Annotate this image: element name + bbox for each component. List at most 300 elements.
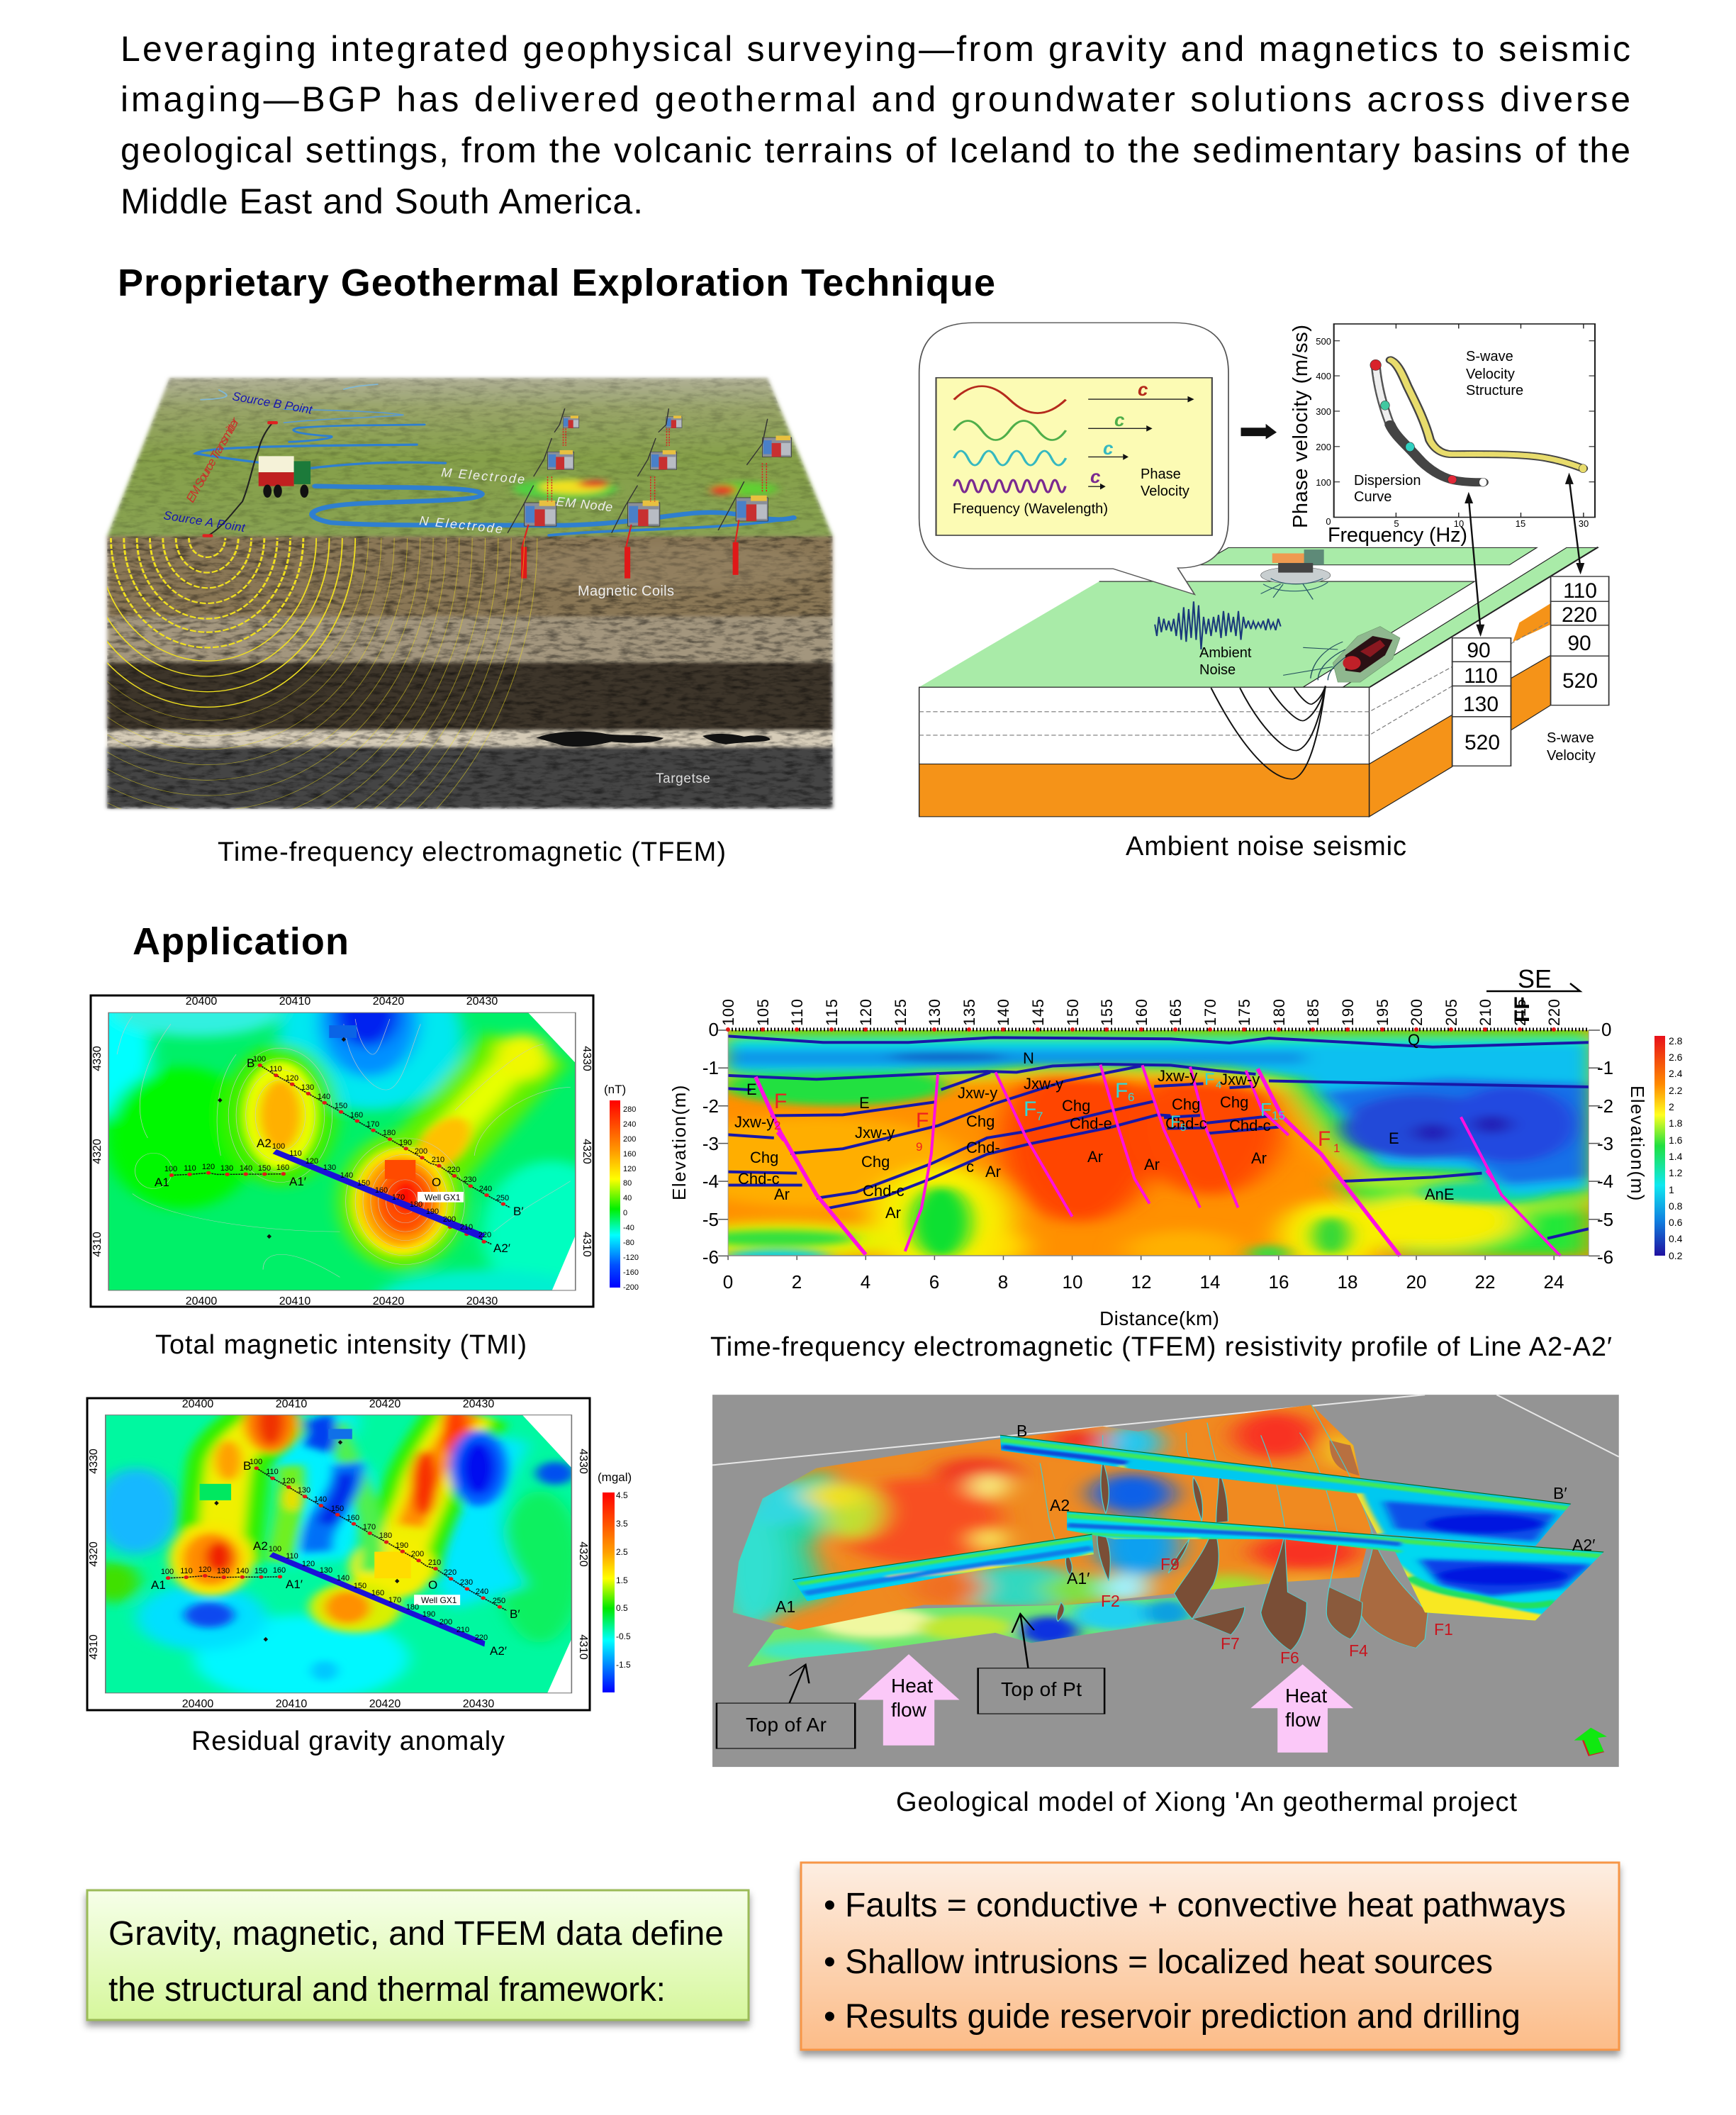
line A2 highlight [273,1149,485,1240]
panel: residual gravity map: 120 [282,1477,295,1485]
panel: TFEM resistivity profile: 18 [1338,1271,1357,1293]
panel: total magnetic intensity map: 20430 [466,1295,498,1307]
panel: TFEM resistivity profile: 8 [998,1271,1008,1293]
panel: TFEM resistivity profile: FF [1511,996,1534,1022]
panel: residual gravity map: 160 [371,1589,384,1597]
panel: TFEM resistivity profile: 0 [723,1271,733,1293]
panel: TFEM block diagram: Targetse [656,771,710,786]
fault labels: 15 [1272,1109,1285,1122]
panel: total magnetic intensity map: 4310 [581,1232,593,1257]
panel: TFEM resistivity profile: 1.6 [1669,1134,1683,1146]
panel: ambient noise seismic diagram: Structure [1466,383,1523,398]
fault labels: F [774,1090,787,1113]
panel: TFEM resistivity profile: 185 [1304,999,1322,1026]
panel: TFEM resistivity profile: -1 [1597,1057,1613,1078]
geologic labels: E [1389,1129,1399,1147]
geologic labels: Chd-c [738,1170,780,1188]
panel: TFEM resistivity profile: 1 [1669,1184,1674,1195]
panel: TFEM block diagram: M Electrode [441,465,525,486]
Top of Pt surface [747,1597,1192,1667]
panel: residual gravity map: 240 [476,1587,488,1596]
panel: ambient noise seismic diagram: c [1114,409,1125,430]
panel: residual gravity map: 170 [388,1596,401,1605]
panel: ambient noise seismic diagram: Phase [1141,467,1181,482]
panel: residual gravity map: 140 [337,1574,349,1583]
panel: residual gravity map: 180 [406,1603,419,1612]
panel: total magnetic intensity map: 20400 [186,995,217,1008]
panel: TFEM resistivity profile: 205 [1443,999,1460,1026]
panel: residual gravity map: 20400 [182,1698,213,1710]
panel: ambient noise seismic diagram: Noise [1199,662,1236,678]
geologic labels: Ar [985,1163,1001,1181]
panel: ambient noise seismic diagram: 5 [1394,518,1399,529]
panel: ambient noise seismic diagram: 30 [1579,518,1589,529]
panel: residual gravity map: 2.5 [616,1547,628,1557]
geologic labels: Chd-e [1070,1115,1112,1132]
geologic labels: E [746,1081,757,1098]
panel: total magnetic intensity map: 200 [443,1215,456,1224]
panel: TFEM resistivity profile: 2.4 [1669,1068,1683,1079]
panel: residual gravity map: 160 [273,1566,286,1575]
callout: green summary box [87,1890,749,2020]
curves [1376,360,1583,482]
panel: residual gravity map: 200 [411,1550,424,1558]
geologic labels: c [966,1158,974,1176]
panel: TFEM resistivity profile: 145 [1029,999,1047,1026]
source wire [207,423,273,536]
panel: 3D geological model: flow [1285,1709,1321,1731]
truck [259,456,294,472]
top of Ar / Pt boxes [717,1703,855,1748]
panel: total magnetic intensity map: 100 [164,1165,177,1173]
fault labels: 5 [1180,1122,1186,1134]
panel: TFEM resistivity profile: SE [1518,964,1552,993]
ambient noise waveform [1155,601,1281,649]
fault labels: F [1024,1098,1036,1121]
panel: ambient noise seismic diagram: Frequency (Hz) [1328,524,1467,547]
panel: residual gravity map: 140 [314,1495,327,1504]
fault labels: 4 [1216,1079,1221,1091]
panel: total magnetic intensity map: 280 [623,1105,636,1114]
panel: 3D geological model: Top of Pt [1001,1678,1082,1700]
panel: TFEM resistivity profile: 2.6 [1669,1051,1683,1063]
panel: ambient noise seismic diagram: Dispersion [1354,473,1421,489]
contours [117,1017,571,1277]
geologic labels: Chg [861,1153,890,1171]
panel: ambient noise seismic diagram: Phase velocity (m/ss) [1289,325,1312,528]
geologic labels [734,1031,1455,1222]
fault labels: F [1204,1070,1215,1089]
panel: total magnetic intensity map: 190 [399,1139,412,1147]
panel: ambient noise seismic diagram: 90 [1467,639,1491,662]
geologic labels: Ar [1087,1148,1103,1166]
panel: TFEM resistivity profile [666,964,1683,1329]
fault lines [756,1065,1560,1256]
panel: residual gravity map [86,1393,632,1710]
panel: residual gravity map: 220 [475,1634,488,1642]
panel: total magnetic intensity map: 130 [301,1083,314,1092]
patches [329,1025,357,1038]
panel: total magnetic intensity map: 180 [410,1200,422,1209]
panel: residual gravity map: 4320 [88,1541,100,1567]
panel: residual gravity map: 190 [396,1541,408,1550]
panel: TFEM resistivity profile: 0 [709,1019,719,1040]
panel: ambient noise seismic diagram: Velocity [1141,484,1189,499]
panel: total magnetic intensity map: A1 [155,1176,169,1189]
panel: TFEM resistivity profile: 2.8 [1669,1035,1683,1047]
geologic labels: Chg [1172,1095,1200,1113]
panel: total magnetic intensity map: Well GX1 [425,1193,461,1202]
panel: total magnetic intensity map: 20410 [279,995,310,1008]
geologic labels: Chd-c [863,1182,905,1200]
panel: total magnetic intensity map: 160 [276,1163,289,1172]
callout: orange bullet box: • Shallow intrusions = localized heat sources [824,1943,1493,1981]
panel: total magnetic intensity map: 170 [392,1193,405,1202]
frequency waves [954,386,1066,492]
panel: TFEM resistivity profile: 22 [1475,1271,1495,1293]
panel: total magnetic intensity map: 4320 [91,1139,103,1164]
panel: TFEM block diagram: N Electrode [419,513,503,536]
heading: application: Application [133,920,349,963]
panel: residual gravity map: A1′ [286,1578,303,1591]
panel: TFEM resistivity profile: 0.8 [1669,1200,1683,1212]
panel: TFEM resistivity profile: 170 [1202,999,1219,1026]
geologic labels: Jxw-y [855,1124,895,1142]
panel: total magnetic intensity map: 130 [323,1163,336,1172]
panel: total magnetic intensity map: 20400 [186,1295,217,1307]
geologic labels: Q [1408,1031,1420,1049]
survey truck [1261,567,1331,584]
caption: TMI: Total magnetic intensity (TMI) [155,1330,527,1360]
heat anomalies [513,479,778,499]
geologic labels: Jxw-y [734,1113,774,1131]
panel: total magnetic intensity map: 20420 [373,995,404,1008]
panel: total magnetic intensity map: -80 [623,1239,634,1247]
panel: total magnetic intensity map: 240 [623,1120,636,1129]
panel: residual gravity map: 160 [347,1514,359,1522]
panel: TFEM resistivity profile: 210 [1477,999,1494,1026]
panel: total magnetic intensity map: 160 [350,1111,363,1120]
panel: TFEM resistivity profile: 100 [719,999,737,1026]
panel: residual gravity map: -1.5 [616,1660,631,1670]
panel: TFEM resistivity profile: 190 [1339,999,1357,1026]
panel: TFEM resistivity profile: 6 [929,1271,939,1293]
panel: residual gravity map: (mgal) [598,1471,632,1484]
fault labels: 6 [1128,1090,1134,1104]
panel: total magnetic intensity map: 140 [240,1164,252,1173]
ray paths [1211,686,1326,779]
panel: residual gravity map: 100 [269,1545,281,1553]
panel: residual gravity map: 180 [379,1531,392,1540]
flow arrow [1241,424,1277,439]
panel: total magnetic intensity map: -160 [623,1268,639,1277]
panel: residual gravity map: 250 [493,1597,505,1605]
panel: 3D geological model: B′ [1553,1484,1567,1502]
panel: 3D geological model: B [1017,1422,1027,1440]
panel: residual gravity map: 100 [250,1458,262,1466]
intro paragraph [121,29,1630,221]
panel: ambient noise seismic diagram: 200 [1316,442,1331,452]
heat flow arrows [858,1654,960,1746]
panel: total magnetic intensity map: 100 [253,1055,266,1064]
horizon lines [728,1036,1589,1239]
panel: total magnetic intensity map: 120 [286,1074,298,1083]
geologic labels: Chg [1220,1093,1248,1111]
callout: green summary box: the structural and thermal framework: [108,1971,666,2009]
panel: TFEM resistivity profile: 0.4 [1669,1233,1683,1244]
fault labels: 7 [1036,1110,1043,1123]
panel: TFEM resistivity profile: 165 [1167,999,1185,1026]
panel: residual gravity map: 3.5 [616,1519,628,1529]
panel: TFEM resistivity profile: 155 [1098,999,1116,1026]
panel: total magnetic intensity map: -200 [623,1283,639,1292]
geologic labels: E [859,1094,870,1112]
panel: total magnetic intensity map: 150 [335,1102,347,1110]
panel: TFEM resistivity profile: -3 [702,1133,719,1154]
panel: 3D geological model: F9 [1160,1555,1180,1573]
panel: residual gravity map: 130 [320,1566,332,1575]
resistivity colorbar [1654,1036,1665,1256]
panel: residual gravity map: -0.5 [616,1631,631,1641]
panel: residual gravity map: 120 [198,1566,211,1574]
panel: total magnetic intensity map: 120 [623,1165,636,1173]
panel: total magnetic intensity map: 200 [415,1147,427,1156]
panel: ambient noise seismic diagram: 10 [1454,518,1464,529]
fault labels [774,1070,1340,1155]
panel: TFEM block diagram: EM Node [556,494,613,514]
geologic labels: Jxw-y [1158,1067,1197,1085]
geologic labels: Chd- [966,1139,1000,1156]
panel: TFEM resistivity profile: 105 [754,999,772,1026]
panel: TFEM resistivity profile: 20 [1406,1271,1426,1293]
panel: TFEM resistivity profile: -3 [1597,1133,1613,1154]
panel: TFEM block diagram: Magnetic Coils [578,584,674,599]
panel: TFEM resistivity profile: 120 [857,999,875,1026]
geologic labels: Chd-c [1165,1115,1207,1132]
panel: ambient noise seismic diagram: S-wave [1466,349,1513,364]
panel: TFEM resistivity profile: 195 [1374,999,1391,1026]
panel: total magnetic intensity map: 110 [289,1149,302,1158]
fault labels: F [1115,1079,1128,1103]
caption: gravity: Residual gravity anomaly [191,1726,505,1756]
panel: TFEM resistivity profile: 110 [788,999,806,1026]
survey line B [260,1065,510,1207]
panel: ambient noise seismic diagram: Velocity [1547,748,1596,764]
panel: total magnetic intensity map: 0 [623,1209,627,1217]
geologic labels: Chg [1062,1097,1090,1115]
panel: ambient noise seismic diagram: 300 [1316,406,1331,417]
callout bubble [919,323,1228,595]
panel: residual gravity map: A1 [151,1578,166,1592]
panel: ambient noise seismic diagram [919,323,1609,817]
panel: 3D geological model: F7 [1221,1634,1240,1653]
panel: total magnetic intensity map: 130 [220,1164,233,1173]
panel: 3D geological model: F1 [1434,1620,1453,1639]
panel: total magnetic intensity map: 220 [447,1166,460,1174]
panel: 3D geological model: F2 [1101,1592,1120,1610]
panel: TFEM resistivity profile: 12 [1131,1271,1151,1293]
panel: total magnetic intensity map: 4310 [91,1232,103,1257]
panel: total magnetic intensity map: 160 [623,1150,636,1159]
geologic labels: Chd-c [1229,1117,1271,1134]
panel: TFEM resistivity profile: 24 [1544,1271,1564,1293]
panel: TFEM resistivity profile: -4 [1597,1171,1613,1192]
axis ticks [718,1030,1600,1260]
panel: TFEM resistivity profile: -5 [1597,1209,1613,1230]
panel: residual gravity map: O [428,1578,437,1592]
train [1333,626,1400,682]
panel: total magnetic intensity map: 100 [272,1142,285,1151]
velocity tables [1452,576,1609,766]
panel: residual gravity map: 0.5 [616,1603,628,1613]
panel: TFEM resistivity profile: 140 [995,999,1012,1026]
panel: residual gravity map: 220 [444,1568,457,1577]
panel: TFEM resistivity profile: 150 [1064,999,1082,1026]
panel: TFEM resistivity profile: Distance(km) [1099,1307,1219,1329]
panel: total magnetic intensity map: 4330 [91,1046,103,1071]
panel: ambient noise seismic diagram: 520 [1465,731,1500,754]
panel: total magnetic intensity map: 110 [269,1065,282,1073]
panel: total magnetic intensity map: 150 [258,1164,271,1173]
section A1 [793,1534,1094,1601]
panel: TFEM resistivity profile: Elevation(m) [1627,1086,1648,1202]
panel: ambient noise seismic diagram: 15 [1516,518,1525,529]
fault labels: 9 [916,1140,922,1154]
panel: residual gravity map: 210 [457,1626,469,1634]
panel: residual gravity map: 20430 [463,1698,494,1710]
panel: TFEM resistivity profile: 180 [1270,999,1288,1026]
fault surfaces [1057,1440,1428,1651]
panel: 3D geological model: Heat [891,1675,933,1697]
panel: residual gravity map: 130 [298,1486,310,1495]
panel: TFEM resistivity profile: -2 [1597,1095,1613,1117]
panel: 3D geological model: Top of Ar [746,1714,827,1736]
panel: total magnetic intensity map: 120 [202,1163,215,1171]
panel: ambient noise seismic diagram: 520 [1562,669,1598,693]
callout: orange bullet box [801,1863,1619,2050]
EM wave fronts [107,537,537,809]
panel: 3D geological model: Heat [1285,1685,1327,1707]
intro paragraph: Leveraging integrated geophysical surveying—from gravity and magnetics to seismic [121,29,1630,69]
geologic labels: Ar [1144,1156,1160,1173]
panel: residual gravity map: 4.5 [616,1490,628,1500]
fault labels: 1 [1333,1142,1340,1155]
panel: residual gravity map: 190 [422,1610,435,1619]
panel: TFEM resistivity profile: 160 [1133,999,1150,1026]
panel: TFEM resistivity profile: 1.4 [1669,1151,1683,1162]
panel: 3D geological model: F6 [1280,1648,1299,1667]
panel: residual gravity map: 20410 [276,1398,307,1410]
panel: total magnetic intensity map: 240 [479,1185,492,1193]
panel: residual gravity map: 20430 [463,1398,494,1410]
panel: residual gravity map: 130 [217,1567,230,1575]
panel: residual gravity map: 110 [286,1552,298,1561]
panel: residual gravity map: 210 [428,1558,441,1567]
panel: TFEM block diagram: Source B Point [231,389,314,417]
panel: total magnetic intensity map: A2 [257,1137,271,1150]
fault labels: 2 [774,1119,780,1132]
panel: TFEM resistivity profile: 1.8 [1669,1117,1683,1129]
panel: total magnetic intensity map: 160 [375,1186,388,1195]
panel: ambient noise seismic diagram: c [1138,379,1148,400]
panel: 3D geological model: F4 [1349,1641,1368,1660]
caption: ambient noise: Ambient noise seismic [1126,832,1406,861]
panel: total magnetic intensity map: 140 [340,1171,353,1180]
panel: ambient noise seismic diagram: 100 [1316,477,1331,488]
panel: TFEM resistivity profile: 0 [1601,1019,1611,1040]
panel: ambient noise seismic diagram: 90 [1567,632,1591,655]
hydrocarbon targets [536,732,770,747]
caption: TFEM: Time-frequency electromagnetic (TFEM) [218,837,726,867]
north arrow [1574,1728,1607,1756]
panel: TFEM resistivity profile: 130 [926,999,943,1026]
panel: total magnetic intensity map: 210 [460,1223,473,1232]
panel: TFEM resistivity profile: 14 [1200,1271,1220,1293]
fault labels: F [1260,1099,1272,1120]
intro paragraph: Middle East and South America. [121,182,643,221]
panel: residual gravity map: 100 [161,1568,174,1576]
panel: total magnetic intensity map: B [247,1056,254,1070]
panel: total magnetic intensity map: 120 [306,1157,318,1166]
intro paragraph: geological settings, from the volcanic terrains of Iceland to the sedimentary basins of the [121,130,1630,170]
panel: TFEM resistivity profile: 4 [861,1271,870,1293]
Top of Ar surface [715,1402,1383,1635]
geologic labels: Chg [750,1149,778,1166]
panel: total magnetic intensity map: 40 [623,1194,632,1202]
panel: ambient noise seismic diagram: 130 [1463,693,1499,716]
panel: ambient noise seismic diagram: c [1090,466,1101,487]
fault labels: F [1318,1127,1331,1151]
panel: TFEM resistivity profile: 115 [823,999,841,1026]
panel: ambient noise seismic diagram: 0 [1326,516,1331,527]
panel: ambient noise seismic diagram: c [1103,437,1114,459]
panel: total magnetic intensity map [67,964,639,1325]
panel: TFEM resistivity profile: 215 [1511,999,1529,1026]
panel: TFEM resistivity profile: 175 [1236,999,1253,1026]
panel: residual gravity map: Well GX1 [421,1595,457,1605]
panel: residual gravity map: 4330 [88,1449,100,1474]
panel: 3D geological model: A2′ [1572,1536,1595,1554]
panel: 3D geological model: A1 [775,1597,795,1616]
fault labels: F [1170,1112,1181,1132]
panel: total magnetic intensity map: A1′ [289,1175,306,1188]
panel: total magnetic intensity map: 140 [318,1093,330,1101]
panel: residual gravity map: 150 [354,1582,366,1590]
panel: ambient noise seismic diagram: 500 [1316,336,1331,347]
heading: proprietary technique: Proprietary Geothermal Exploration Technique [118,262,995,304]
panel: ambient noise seismic diagram: S-wave [1547,730,1594,746]
panel: residual gravity map: B′ [510,1607,520,1621]
panel: TFEM resistivity profile: 0.2 [1669,1250,1683,1261]
geologic labels: Jxw-y [1220,1071,1260,1088]
caption: resistivity profile: Time-frequency electromagnetic (TFEM) resistivity profile of Line A2-A2′ [710,1332,1612,1362]
panel: TFEM resistivity profile: 2 [792,1271,802,1293]
panel: TFEM resistivity profile: 125 [892,999,909,1026]
panel: 3D geological model [712,1395,1619,1767]
link arrows [1465,473,1584,637]
panel: TFEM block diagram: EM Source Transmitter [184,415,242,505]
panel: total magnetic intensity map: -40 [623,1224,634,1232]
geologic labels: Ar [774,1185,790,1203]
gravity colorbar [603,1492,615,1692]
panel: TFEM resistivity profile: 0.6 [1669,1217,1683,1228]
panel: TFEM resistivity profile: 10 [1063,1271,1082,1293]
callout: orange bullet box: • Faults = conductive + convective heat pathways [824,1887,1566,1924]
panel: ambient noise seismic diagram: Ambient [1199,645,1252,661]
geologic labels: AnE [1425,1185,1455,1203]
panel: total magnetic intensity map: A2′ [493,1241,510,1255]
panel: residual gravity map: 110 [266,1468,279,1476]
